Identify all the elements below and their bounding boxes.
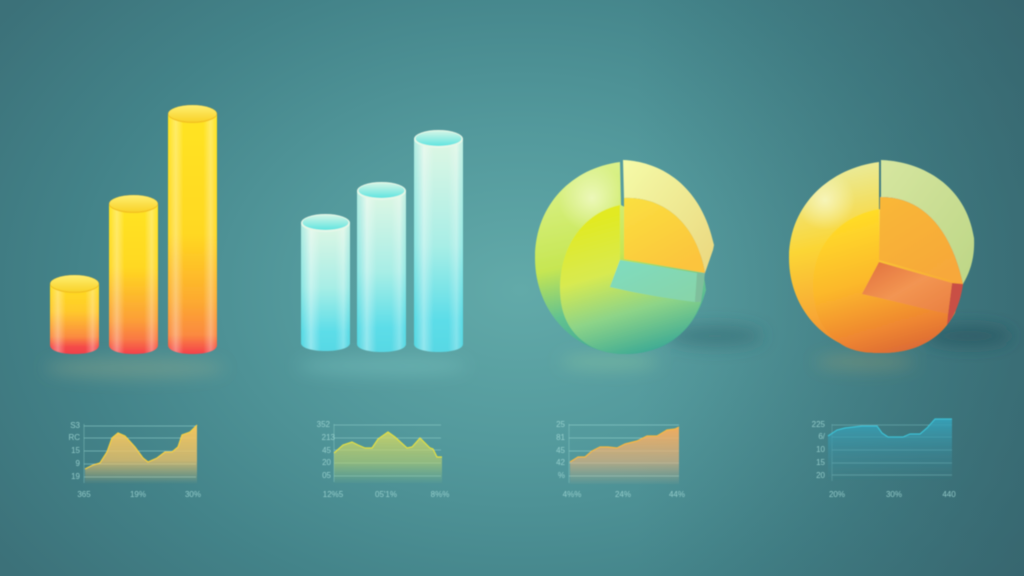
axis labels: 25 xyxy=(556,420,566,429)
notch side xyxy=(695,273,705,302)
axis labels: % xyxy=(558,471,565,480)
axis labels: 12%5 xyxy=(323,490,344,499)
area chart 4 xyxy=(812,419,956,499)
axis labels: 24% xyxy=(615,490,631,499)
pie chart: orange and yellow xyxy=(789,160,974,353)
bar: short aqua xyxy=(301,214,350,351)
axis labels: 225 xyxy=(812,420,826,429)
slice face xyxy=(624,198,705,273)
floor glow and shadows xyxy=(45,325,1012,378)
bar: medium aqua xyxy=(357,182,406,352)
notch floor xyxy=(862,262,952,314)
axis labels: 10 xyxy=(816,445,826,454)
bar: tall aqua xyxy=(414,130,463,352)
axis labels: 30% xyxy=(185,490,201,499)
pie body xyxy=(535,162,706,354)
axis labels: 9 xyxy=(76,459,81,468)
axis labels xyxy=(68,421,201,499)
pie body xyxy=(789,162,963,353)
axis labels: 45 xyxy=(322,446,332,455)
axis labels xyxy=(812,420,956,499)
axis labels: 19% xyxy=(130,490,146,499)
axis labels: 45 xyxy=(556,446,566,455)
slice top xyxy=(881,160,974,284)
bar chart: aqua cylinders xyxy=(301,130,463,352)
axis labels: 30% xyxy=(886,490,902,499)
axis labels: 20% xyxy=(829,490,845,499)
slice top xyxy=(623,160,714,273)
bar chart: yellow cylinders xyxy=(50,105,217,354)
area xyxy=(334,432,442,483)
bar: short yellow xyxy=(50,275,99,354)
pie front face xyxy=(813,209,948,353)
axis labels: 365 xyxy=(77,490,91,499)
pie front face xyxy=(560,205,701,354)
axis labels xyxy=(556,420,685,499)
bar: tall yellow xyxy=(168,105,217,354)
area xyxy=(85,425,197,484)
axis labels: 440 xyxy=(942,490,956,499)
area chart 1 xyxy=(68,421,201,499)
axis labels: 15 xyxy=(816,458,826,467)
axis labels: 81 xyxy=(556,433,566,442)
bar: medium yellow xyxy=(109,195,158,354)
axis labels: 20 xyxy=(322,458,332,467)
axis labels: 05 xyxy=(322,471,332,480)
axis labels: 20 xyxy=(816,471,826,480)
axis labels: 19 xyxy=(71,472,81,481)
axis labels: 15 xyxy=(71,446,81,455)
notch side xyxy=(947,283,963,325)
axis labels: 213 xyxy=(322,433,336,442)
area chart 3 xyxy=(556,420,685,499)
grid lines xyxy=(569,424,679,483)
axis labels: 4%% xyxy=(563,490,581,499)
axis labels: 42 xyxy=(556,458,566,467)
slice face xyxy=(879,197,963,284)
axis labels xyxy=(317,420,449,499)
area xyxy=(570,427,679,484)
axis labels: 6/ xyxy=(818,432,826,441)
grid lines xyxy=(334,424,441,482)
area chart 2 xyxy=(317,420,449,499)
axis labels: 05'1% xyxy=(375,490,397,499)
axis labels: RC xyxy=(68,433,80,442)
grid lines xyxy=(832,424,952,481)
axis labels: 44% xyxy=(669,490,685,499)
grid lines xyxy=(84,424,196,483)
notch floor xyxy=(610,260,697,302)
axis labels: 8%% xyxy=(431,490,449,499)
axis labels: S3 xyxy=(70,421,81,430)
axis labels: 352 xyxy=(317,420,331,429)
pie chart: green and yellow xyxy=(535,160,714,354)
area xyxy=(828,419,952,481)
